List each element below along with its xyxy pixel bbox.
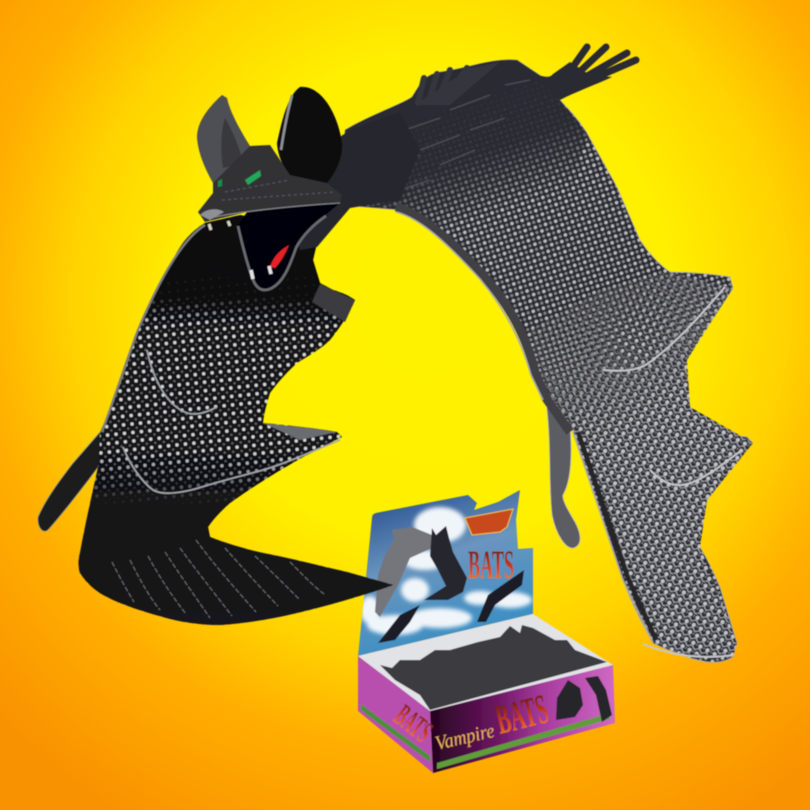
side logo: BATS (388, 697, 440, 749)
open mouth (238, 203, 340, 290)
head and snout (198, 145, 342, 222)
inner left ear (221, 118, 243, 168)
box front (430, 665, 615, 773)
right leg (545, 395, 580, 548)
eye (245, 170, 261, 185)
front stripe (437, 713, 610, 769)
product box: BATS (468, 542, 514, 587)
right wing (340, 60, 753, 662)
left ear (197, 95, 255, 183)
side stripe (361, 704, 430, 762)
lower ribs (112, 540, 324, 618)
clouds (360, 507, 532, 635)
left leg (38, 432, 102, 531)
box picture of bat (556, 676, 612, 722)
box interior (358, 614, 613, 712)
front logo: BATS (491, 686, 553, 744)
inner band (396, 207, 570, 432)
tip highlight (263, 423, 337, 440)
lower dark edge (578, 432, 656, 640)
bat head (197, 87, 420, 290)
card logo (465, 509, 514, 587)
inner edge highlight (396, 212, 653, 643)
fangs (251, 266, 271, 279)
fur streaks (385, 80, 530, 190)
left wing (78, 215, 393, 625)
right ear (277, 87, 342, 185)
wing bones (603, 287, 742, 657)
upper teeth (209, 221, 230, 230)
shoulder toes (415, 62, 500, 105)
snout tip highlight (200, 209, 224, 220)
foot and claws (530, 47, 636, 100)
card bat illustrations (375, 526, 524, 643)
snout ridges (222, 180, 335, 200)
product box (358, 490, 615, 773)
wing ribs (123, 350, 340, 493)
lower bright texture (530, 272, 753, 657)
bat toy (38, 47, 753, 662)
neck and chest (290, 112, 420, 250)
wing shading (78, 215, 393, 625)
mouth rim (238, 216, 326, 290)
ear highlight (281, 95, 292, 150)
back card (358, 490, 533, 656)
fur shoulder (340, 60, 587, 273)
upper lip highlight (210, 203, 340, 218)
toy bats in box (380, 625, 607, 710)
elbow detail (312, 284, 355, 322)
leading edge (102, 225, 205, 432)
front script: Vampire (433, 720, 497, 755)
tongue (270, 245, 289, 268)
box left side (358, 656, 433, 773)
other eye (218, 179, 222, 187)
